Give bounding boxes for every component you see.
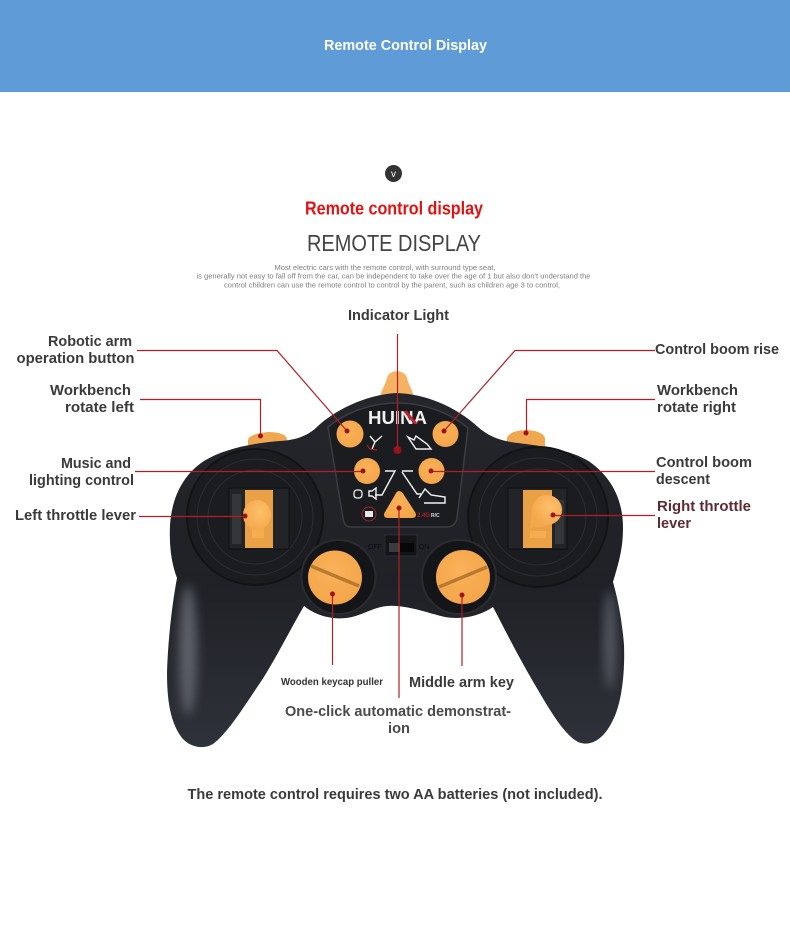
icon: v badge: v: [391, 169, 396, 180]
label: Robotic arm operation button: operation button: [16, 351, 134, 367]
header banner: [0, 0, 790, 92]
right round key: [422, 540, 496, 614]
label: Wooden keycap puller: Wooden keycap puller: [281, 677, 383, 688]
label: Music and lighting control: [29, 456, 134, 489]
left stick well: [187, 449, 323, 585]
label: Workbench rotate left: rotate left: [65, 400, 134, 416]
center panel: [328, 403, 468, 527]
description text: is generally not easy to fall off from the car, can be independent to take over the age of 1 but also don't understand the: [196, 272, 590, 280]
antenna: [380, 371, 414, 398]
label: Control boom descent: descent: [656, 472, 710, 488]
indicator led: [394, 446, 402, 454]
label: Right throttle lever: Right throttle: [657, 499, 751, 515]
left round key: [302, 540, 376, 614]
triangle button: [384, 491, 416, 518]
header banner: Remote Control Display: [324, 37, 488, 54]
mid right button: [418, 458, 444, 484]
label: One-click automatic demonstration: One-click automatic demonstrat-: [285, 704, 511, 720]
leader lines: [135, 334, 655, 698]
label: Right throttle lever: lever: [657, 516, 691, 532]
controller body: [167, 393, 624, 747]
label: Workbench rotate right: [657, 383, 738, 416]
label: Music and lighting control: Music and: [61, 456, 131, 472]
shoulder button right: [507, 430, 545, 446]
shoulder button left: [248, 432, 287, 446]
label: One-click automatic demonstration: [285, 704, 511, 737]
label: Music and lighting control: lighting control: [29, 473, 134, 489]
panel icons: R/C: [431, 513, 440, 519]
label: Robotic arm operation button: Robotic arm: [48, 334, 132, 350]
label: Control boom descent: Control boom: [656, 455, 752, 471]
top left button: [336, 420, 364, 448]
label: Robotic arm operation button: [16, 334, 134, 367]
label: Control boom rise: Control boom rise: [655, 342, 779, 358]
icon: v badge: [385, 165, 402, 182]
label: Right throttle lever: [657, 499, 751, 532]
label: Control boom descent: [656, 455, 752, 488]
brand logo: HUINA: [368, 408, 427, 428]
top right button: [432, 421, 458, 447]
grip highlights: [179, 585, 616, 715]
panel icons: [354, 436, 445, 521]
mid left button: [354, 458, 380, 484]
heading: Remote control display: Remote control display: [305, 198, 483, 218]
label: Left throttle lever: Left throttle lever: [15, 508, 136, 524]
description text: [196, 263, 590, 290]
description text: control children can use the remote control to control by the parent, such as children age 3 to control,: [224, 280, 560, 290]
label: Middle arm key: Middle arm key: [409, 675, 514, 691]
label: Indicator Light: Indicator Light: [348, 308, 449, 324]
label: Workbench rotate right: Workbench: [657, 383, 738, 399]
label: Workbench rotate left: Workbench: [50, 383, 131, 399]
subheading: REMOTE DISPLAY: REMOTE DISPLAY: [307, 230, 481, 256]
description text: Most electric cars with the remote control, with surround type seat,: [274, 263, 496, 272]
label: One-click automatic demonstration: ion: [388, 721, 410, 737]
remote controller: [167, 371, 624, 747]
panel icons: 2.4G: [417, 513, 430, 519]
label: Workbench rotate right: rotate right: [657, 400, 736, 416]
power switch: [368, 535, 429, 556]
right stick well: [468, 447, 608, 587]
note: batteries: The remote control requires two AA batteries (not included).: [188, 787, 602, 803]
label: Workbench rotate left: [50, 383, 134, 416]
power switch: OFF: [368, 544, 382, 551]
power switch: ON: [419, 544, 429, 551]
